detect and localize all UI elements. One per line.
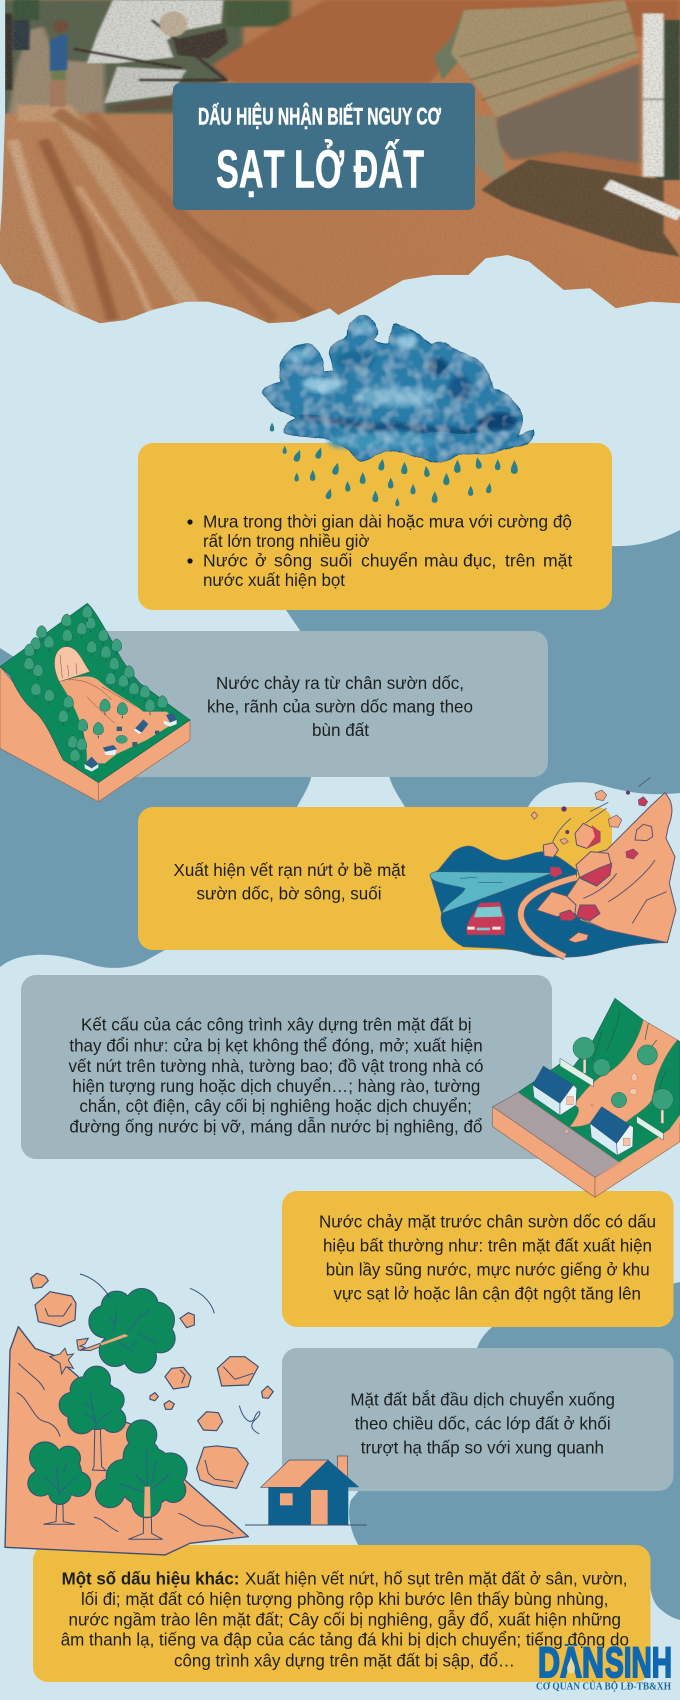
text block: Nước chảy ra từ chân sườn dốc,: [216, 673, 464, 693]
bullet list: Mưa trong thời gian dài hoặc mưa với cường độ: [203, 511, 572, 531]
icon: watercolor rain cloud: [263, 316, 534, 463]
logo: Dân Sinh: [536, 1644, 671, 1692]
tree 2: [60, 1367, 125, 1433]
bullet list: đục,: [463, 551, 496, 571]
bullet list: nước xuất hiện bọt: [203, 570, 345, 590]
text block: Kết cấu của các công trình xây dựng trên mặt đất bị: [81, 1015, 472, 1035]
text block: trượt hạ thấp so với xung quanh: [361, 1437, 604, 1457]
panel: sign 5 groundwater: [282, 1191, 674, 1327]
text block: vết nứt trên tường nhà, tường bao; đồ vật trong nhà có: [68, 1056, 484, 1076]
text block: lối đi; mặt đất có hiện tượng phồng rộp khi bước lên thấy bùng nhùng,: [81, 1589, 608, 1609]
tree 3: [28, 1442, 90, 1504]
cliff: [5, 1327, 248, 1555]
bullet list: mặt: [543, 551, 572, 571]
text block: Mặt đất bắt đầu dịch chuyển xuống: [350, 1389, 615, 1410]
text block: bùn lầy sũng nước, mực nước giếng ở khu: [326, 1260, 650, 1280]
text block: [207, 673, 473, 740]
panel: sign 6 ground moving: [282, 1348, 674, 1491]
car: [467, 902, 505, 935]
text block: khe, rãnh của sườn dốc mang theo: [207, 696, 473, 716]
text block: công trình xây dựng trên mặt đất bị sập, đổ…: [174, 1650, 515, 1670]
logo: Dân Sinh: DÂN: [538, 1638, 604, 1687]
bullet list: [187, 511, 572, 590]
text block: Một số dấu hiệu khác:: [62, 1568, 239, 1588]
house front: [590, 1107, 633, 1155]
house: [245, 1456, 367, 1525]
text block: đường ống nước bị vỡ, máng dẫn nước bị nghiêng, đổ: [69, 1116, 483, 1137]
text block: sườn dốc, bờ sông, suối: [196, 884, 382, 904]
illustration: cliff, falling trees and boulders, house: [5, 1273, 367, 1555]
text block: hiệu bất thường như: trên mặt đất xuất hiện: [323, 1236, 652, 1256]
text block: âm thanh lạ, tiếng va đập của các tảng đá khi bị dịch chuyển; tiếng động do: [61, 1630, 629, 1650]
text block: chắn, cột điện, cây cối bị nghiêng hoặc dịch chuyển;: [79, 1095, 472, 1116]
panel: sign 4 structures: [21, 975, 552, 1159]
bullet list: trên: [505, 551, 535, 571]
text block: hiện tượng rung hoặc dịch chuyển…; hàng rào, tường: [72, 1076, 480, 1096]
text block: theo chiều dốc, các lớp đất ở khối: [355, 1413, 611, 1433]
text block: [174, 860, 406, 904]
text block: Xuất hiện vết rạn nứt ở bề mặt: [174, 860, 406, 880]
illustration: houses with mudslide behind: [493, 998, 680, 1197]
text block: [61, 1568, 629, 1670]
bullet list: sông: [274, 551, 312, 571]
text block: [350, 1389, 615, 1457]
bullet list: chuyển: [361, 551, 418, 571]
bullet list: Nước: [203, 551, 248, 571]
boulders: [31, 1273, 273, 1488]
bullet list: rất lớn trong nhiều giờ: [203, 531, 370, 551]
text block: Nước chảy mặt trước chân sườn dốc có dấu: [319, 1212, 656, 1232]
background blob: lower blue wave: [349, 1282, 680, 1620]
bullet list: ở: [255, 551, 267, 571]
panel: other signs: [33, 1545, 650, 1682]
text block: [68, 1015, 484, 1137]
text block: Xuất hiện vết nứt, hố sụt trên mặt đất ở sân, vườn,: [245, 1568, 628, 1588]
text block: nước ngầm trào lên mặt đất; Cây cối bị nghiêng, gẫy đổ, xuất hiện những: [68, 1609, 621, 1630]
panel: sign 2 muddy water: [90, 631, 548, 777]
text block: thay đổi như: cửa bị kẹt không thể đóng, mở; xuất hiện: [69, 1035, 483, 1055]
background blob: upper blue wave: [0, 530, 680, 968]
falling tree: [89, 1289, 175, 1373]
bullet list: suối: [320, 551, 352, 571]
tree 4: [96, 1420, 187, 1517]
hero photo: landslide scene: [0, 0, 680, 333]
illustration: rockfall on coastal road: [430, 777, 676, 957]
bullet list: màu: [424, 551, 458, 571]
trunks: [43, 1334, 163, 1539]
text block: vực sạt lở hoặc lân cận đột ngột tăng lên: [334, 1283, 641, 1303]
panel: sign 1 rain: [138, 443, 612, 610]
icon: raindrops: [270, 423, 518, 506]
illustration: isometric hillside landslide: [0, 603, 190, 802]
heading line 2: SẠT LỞ ĐẤT: [216, 140, 424, 200]
panel: sign 3 cracks: [138, 807, 612, 950]
text block: [319, 1212, 656, 1303]
title panel: [173, 83, 475, 210]
house back: [533, 1066, 577, 1115]
text block: bùn đất: [312, 720, 369, 740]
heading line 1: DẤU HIỆU NHẬN BIẾT NGUY CƠ: [198, 102, 441, 130]
